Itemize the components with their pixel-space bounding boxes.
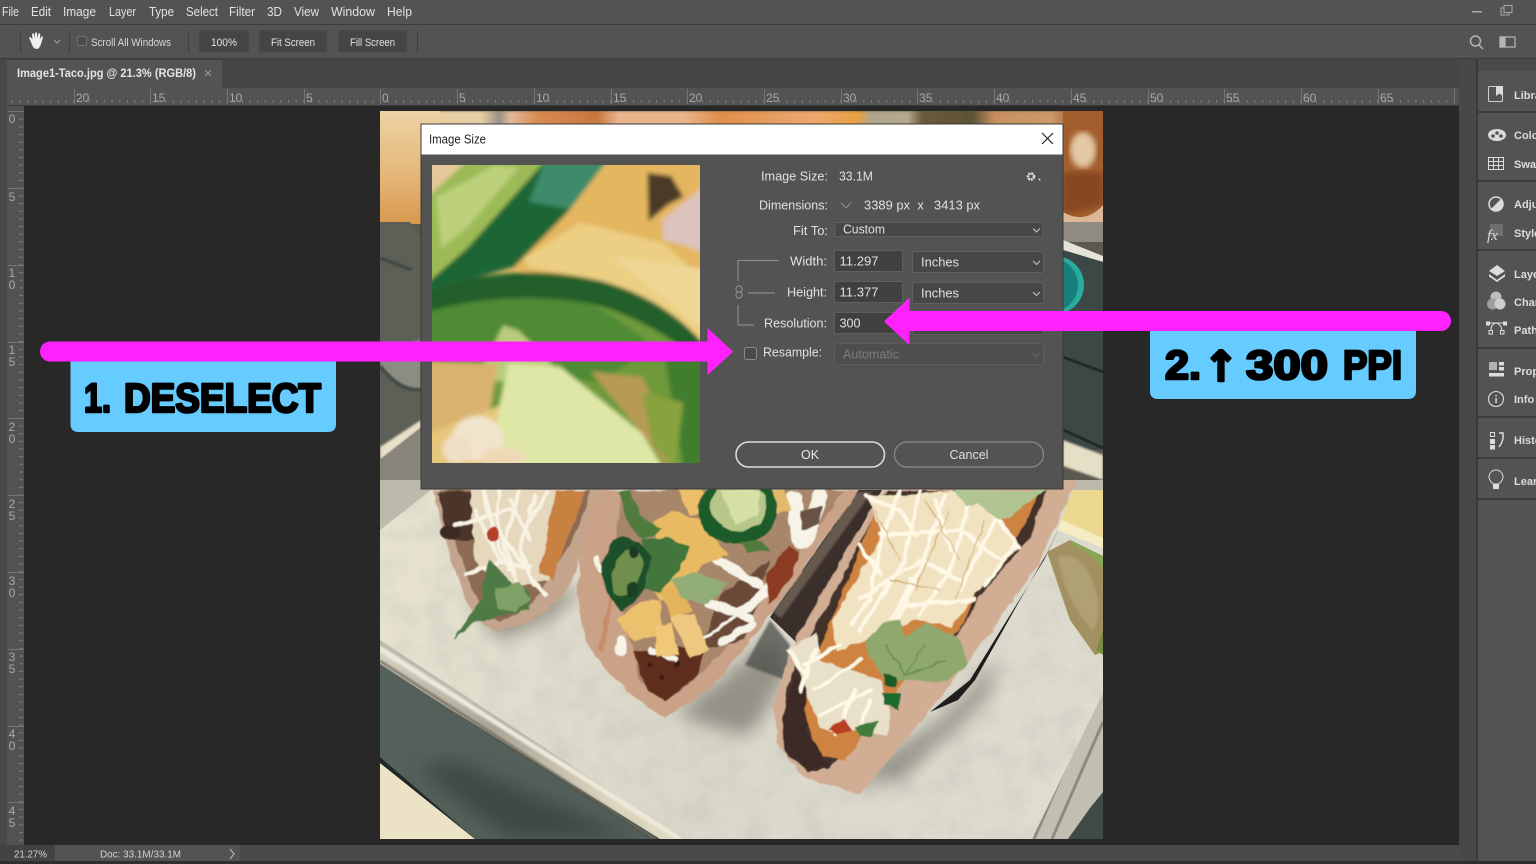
icon: adjustments bbox=[1489, 197, 1503, 211]
image size readout: Image Size: bbox=[761, 170, 828, 184]
horizontal ruler: 5 bbox=[306, 91, 313, 105]
resolution row: Resolution: bbox=[764, 316, 827, 330]
status bar: Doc: 33.1M/33.1M bbox=[100, 848, 181, 860]
horizontal ruler: 20 bbox=[689, 91, 703, 105]
jalapeno rings bbox=[602, 476, 778, 612]
horizontal ruler: 20 bbox=[76, 91, 90, 105]
horizontal ruler: 35 bbox=[919, 91, 933, 105]
callout: 1. deselect: 1. bbox=[84, 375, 111, 421]
right side strip bbox=[1459, 59, 1478, 861]
fit to row: Custom bbox=[843, 222, 885, 236]
image preview bbox=[428, 161, 704, 467]
photo upper left background bbox=[380, 111, 440, 480]
metal taco holder bbox=[745, 490, 1063, 712]
icon: properties bbox=[1489, 362, 1504, 376]
menu bar: View bbox=[294, 5, 320, 19]
icon: history bbox=[1490, 432, 1503, 449]
document tab bar bbox=[0, 59, 1478, 88]
resolution row: 300 bbox=[840, 316, 861, 330]
dimensions row bbox=[759, 198, 981, 212]
resample row: Resample: bbox=[763, 346, 822, 360]
resolution row bbox=[764, 312, 1044, 334]
cilantro leaves bbox=[620, 490, 770, 602]
width row bbox=[790, 250, 1044, 272]
vertical ruler: 0 bbox=[9, 739, 16, 753]
vertical ruler: 2 bbox=[9, 420, 16, 434]
menu bar: Select bbox=[186, 5, 218, 19]
icon: paths bbox=[1486, 322, 1506, 334]
arrow: pointing at resolution field bbox=[884, 298, 1451, 345]
icon: swatches bbox=[1488, 157, 1504, 170]
callout: 1. deselect: DESELECT bbox=[124, 375, 321, 421]
dimensions row: 3389 px bbox=[864, 198, 911, 212]
icon: color bbox=[1488, 129, 1506, 141]
horizontal ruler: 30 bbox=[843, 91, 857, 105]
paper shadows bbox=[470, 590, 1000, 785]
icon: styles: fx bbox=[1487, 228, 1498, 244]
dimensions row: Dimensions: bbox=[759, 198, 828, 212]
horizontal ruler: 50 bbox=[1150, 91, 1164, 105]
image size readout: 33.1M bbox=[839, 170, 873, 184]
horizontal ruler bbox=[8, 88, 1459, 106]
dialog: Image Size bbox=[421, 124, 1063, 489]
menu bar: File bbox=[2, 5, 19, 19]
resample row: Automatic bbox=[843, 348, 899, 362]
fit to row bbox=[793, 222, 1043, 238]
height row bbox=[787, 282, 1044, 304]
vertical ruler bbox=[8, 106, 24, 845]
pineapple chunks bbox=[617, 490, 790, 658]
shredded cabbage bbox=[833, 490, 1020, 653]
callout: 1. deselect bbox=[70, 361, 336, 432]
icon: search bbox=[1470, 36, 1483, 49]
height row: Height: bbox=[787, 286, 827, 300]
height row: 11.377 bbox=[840, 286, 879, 300]
vertical ruler: 0 bbox=[9, 278, 16, 292]
horizontal ruler: 60 bbox=[1303, 91, 1317, 105]
canvas pasteboard bbox=[24, 106, 1459, 845]
crema on middle taco bbox=[596, 495, 820, 660]
menu bar: Edit bbox=[31, 5, 51, 19]
menu bar bbox=[0, 0, 1536, 25]
arrow: pointing at resample checkbox bbox=[40, 328, 733, 375]
vertical ruler: 2 bbox=[9, 497, 16, 511]
right panel dock: Info bbox=[1514, 394, 1534, 406]
options bar: Scroll All Windows bbox=[91, 37, 171, 49]
callout: 2. up 300 PPI: 300 bbox=[1246, 342, 1328, 388]
width row: Inches bbox=[921, 256, 959, 270]
horizontal ruler: 15 bbox=[613, 91, 627, 105]
black beans bbox=[781, 696, 831, 773]
Cancel button bbox=[894, 442, 1044, 467]
horizontal ruler: 25 bbox=[766, 91, 780, 105]
horizontal ruler: 15 bbox=[152, 91, 166, 105]
horizontal ruler: 10 bbox=[536, 91, 550, 105]
menu bar: Help bbox=[387, 5, 412, 19]
vertical ruler: 5 bbox=[9, 662, 16, 676]
vertical ruler: 4 bbox=[9, 804, 16, 818]
OK button bbox=[736, 442, 884, 467]
photo top edge bbox=[440, 111, 1063, 124]
icon: libraries bbox=[1488, 86, 1503, 102]
vertical ruler: 5 bbox=[9, 190, 16, 204]
icon: layers bbox=[1489, 265, 1505, 282]
vertical ruler: 0 bbox=[9, 112, 16, 126]
vertical ruler: 1 bbox=[9, 266, 16, 280]
lemon and lime wedges bbox=[1047, 490, 1103, 655]
options bar: 100% bbox=[211, 37, 237, 49]
cilantro on right taco bbox=[855, 490, 1047, 738]
callout: 2. up 300 PPI: ↑ bbox=[1203, 342, 1239, 391]
icon: styles bbox=[1487, 224, 1503, 244]
dimensions row: x bbox=[918, 198, 924, 212]
horizontal ruler: 55 bbox=[1226, 91, 1240, 105]
menu bar: Layer bbox=[109, 5, 136, 19]
photo: tacos on a tray bbox=[380, 111, 1103, 840]
icon: gear menu bbox=[1028, 174, 1040, 180]
vertical ruler: 3 bbox=[9, 574, 16, 588]
icon: learn bbox=[1489, 470, 1503, 488]
vertical ruler: 1 bbox=[9, 343, 16, 357]
right panel dock bbox=[1478, 59, 1536, 861]
menu bar: Filter bbox=[229, 5, 255, 19]
vertical ruler: 0 bbox=[9, 432, 16, 446]
horizontal ruler: 5 bbox=[459, 91, 466, 105]
OK button: OK bbox=[801, 448, 820, 462]
vertical ruler: 0 bbox=[9, 586, 16, 600]
vertical ruler: 4 bbox=[9, 727, 16, 741]
icon: hand tool bbox=[29, 32, 43, 49]
resample row bbox=[744, 344, 1044, 364]
width row: Width: bbox=[790, 254, 827, 268]
Cancel button: Cancel bbox=[950, 448, 988, 462]
options bar: Fill Screen bbox=[350, 37, 395, 49]
icon: close bbox=[1042, 133, 1053, 144]
middle taco bbox=[578, 476, 860, 718]
height row: Inches bbox=[921, 286, 959, 300]
menu bar: Image bbox=[63, 5, 96, 19]
vertical ruler: 5 bbox=[9, 355, 16, 369]
menu bar: Window bbox=[331, 5, 376, 19]
callout: 2. up 300 PPI: PPI bbox=[1343, 342, 1402, 388]
callout: 2. up 300 PPI: 2. bbox=[1165, 342, 1201, 388]
horizontal ruler: 45 bbox=[1073, 91, 1087, 105]
photo right edge background bbox=[1063, 111, 1103, 480]
tray rim and table bbox=[380, 480, 1103, 840]
icon: channels bbox=[1487, 292, 1506, 310]
icon: info bbox=[1488, 392, 1504, 406]
options bar bbox=[0, 25, 1536, 59]
menu bar: Type bbox=[149, 5, 174, 19]
constrain proportions link bbox=[736, 260, 779, 325]
horizontal ruler: 0 bbox=[382, 91, 389, 105]
callout: 2. up 300 PPI bbox=[1150, 331, 1416, 399]
dialog: Image Size: Image Size bbox=[429, 132, 486, 146]
left taco bbox=[433, 490, 600, 640]
vertical ruler: 5 bbox=[9, 816, 16, 830]
vertical ruler: 5 bbox=[9, 509, 16, 523]
vertical ruler: 3 bbox=[9, 650, 16, 664]
horizontal ruler: 40 bbox=[996, 91, 1010, 105]
document tab bar: Image1-Taco.jpg @ 21.3% (RGB/8) bbox=[17, 68, 196, 80]
right taco bbox=[773, 480, 1077, 795]
horizontal ruler: 65 bbox=[1380, 91, 1394, 105]
width row: 11.297 bbox=[840, 254, 879, 268]
left edge strip bbox=[0, 59, 7, 845]
dimensions row: 3413 px bbox=[934, 198, 981, 212]
horizontal ruler: 10 bbox=[229, 91, 243, 105]
status bar: 21.27% bbox=[14, 848, 47, 860]
parchment paper bbox=[380, 490, 1103, 839]
options bar: Fit Screen bbox=[271, 37, 315, 49]
menu bar: 3D bbox=[267, 5, 282, 19]
status bar bbox=[0, 845, 1536, 864]
icon: workspace panel bbox=[1500, 37, 1515, 47]
fit to row: Fit To: bbox=[793, 224, 828, 238]
image size readout bbox=[761, 170, 873, 184]
